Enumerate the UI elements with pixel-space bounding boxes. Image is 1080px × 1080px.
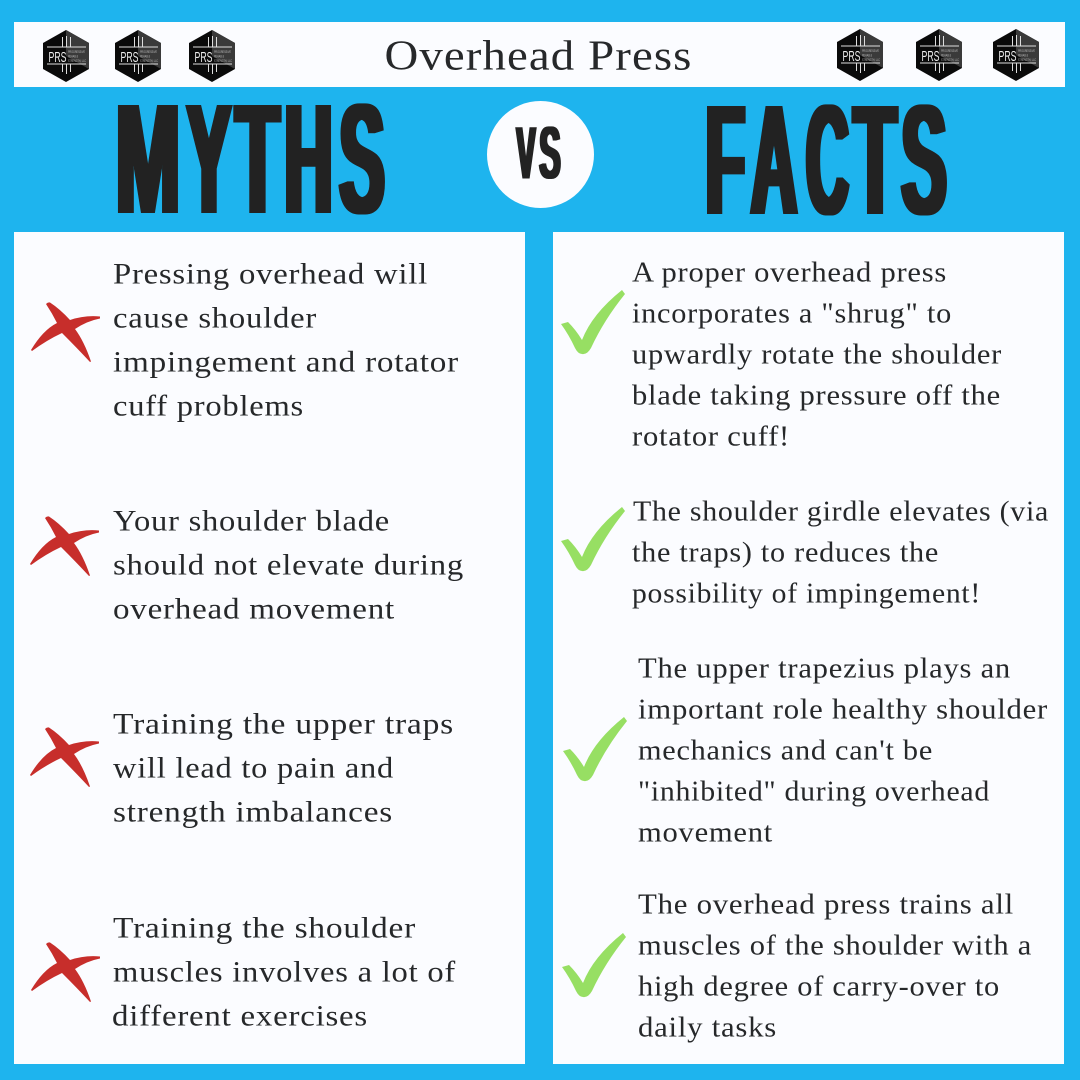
icon: PRS logo 4 <box>837 29 883 81</box>
icon: PRS logo 1: PROGRESSIVE <box>68 50 85 54</box>
text: myth 2: Your shoulder blade <box>113 504 390 538</box>
icon: green check <box>561 290 625 354</box>
text: fact 3: The upper trapezius plays an <box>638 654 1011 684</box>
text: myth 3: Training the upper traps <box>113 708 454 740</box>
icon: red cross <box>30 727 99 787</box>
text: fact 3 <box>638 654 1048 848</box>
icon: green check <box>562 933 626 997</box>
text: fact 4: The overhead press trains all <box>638 890 1014 920</box>
text: fact 1: blade taking pressure off the <box>632 380 1001 412</box>
text: myth 4: Training the shoulder <box>113 912 416 944</box>
icon: PRS logo 3: REHAB & <box>214 54 224 58</box>
badge: VS <box>487 101 594 208</box>
text: fact 2 <box>632 496 1049 610</box>
fact 2 <box>561 496 1049 610</box>
icon: PRS logo 2: STRENGTH, LLC <box>140 59 158 63</box>
text: fact 1: A proper overhead press <box>632 258 947 288</box>
icon: PRS logo 6: PROGRESSIVE <box>1018 49 1035 53</box>
panel: myths <box>14 232 525 1064</box>
heading: FACTS: F <box>706 73 745 248</box>
text: myth 3: strength imbalances <box>113 796 393 828</box>
icon: PRS logo 6: REHAB & <box>1018 54 1028 58</box>
badge: VS: S <box>539 112 561 194</box>
icon: PRS logo 1: STRENGTH, LLC <box>68 59 86 63</box>
heading: FACTS: C <box>806 73 848 248</box>
icon: PRS logo 1 <box>43 30 89 82</box>
myth 1 <box>31 258 459 422</box>
icon: PRS logo 5: STRENGTH, LLC <box>941 58 959 62</box>
myth 3 <box>30 708 454 828</box>
icon: PRS logo 2 <box>115 30 161 82</box>
text: fact 2: the traps) to reduces the <box>632 538 939 568</box>
text: fact 4 <box>638 890 1032 1044</box>
icon: PRS logo 2: PRS <box>120 49 138 66</box>
badge: VS: V <box>516 112 536 194</box>
heading: MYTHS <box>116 72 385 247</box>
text: fact 1: rotator cuff! <box>632 422 790 452</box>
icon: green check <box>561 507 625 571</box>
icon: PRS logo 1: PRS <box>48 49 66 66</box>
text: fact 2: possibility of impingement! <box>632 578 981 610</box>
icon: PRS logo 2: PROGRESSIVE <box>140 50 157 54</box>
text: myth 4 <box>112 912 456 1032</box>
text: myth 1: impingement and rotator <box>113 346 459 378</box>
text: fact 1 <box>632 258 1002 452</box>
icon: PRS logo 3: PRS <box>194 49 212 66</box>
icon: PRS logo 3: PROGRESSIVE <box>214 50 231 54</box>
title: Overhead Press <box>384 34 692 80</box>
myth 4 <box>31 912 456 1032</box>
heading: MYTHS: M <box>116 72 180 247</box>
text: S <box>901 73 947 248</box>
text: fact 1: upwardly rotate the shoulder <box>632 340 1002 370</box>
text: myth 1: cuff problems <box>113 390 304 422</box>
text: fact 4: daily tasks <box>638 1012 777 1044</box>
text: myth 1: cause shoulder <box>113 302 317 334</box>
text: fact 1: incorporates a "shrug" to <box>632 298 952 330</box>
icon: PRS logo 6 <box>993 29 1039 81</box>
heading: MYTHS: T <box>236 72 279 247</box>
icon: PRS logo 3 <box>189 30 235 82</box>
icon: PRS logo 5 <box>916 29 962 81</box>
text: myth 3: will lead to pain and <box>113 752 394 784</box>
icon: PRS logo 3: STRENGTH, LLC <box>214 59 232 63</box>
text: fact 4: high degree of carry-over to <box>638 972 1000 1002</box>
heading: MYTHS: Y <box>187 72 231 247</box>
text: myth 2: should not elevate during <box>113 548 464 582</box>
text: myth 2: overhead movement <box>113 592 395 626</box>
icon: PRS logo 4: PROGRESSIVE <box>862 49 879 53</box>
text: myth 1: Pressing overhead will <box>113 258 428 290</box>
myth 2 <box>30 504 464 626</box>
fact 1 <box>561 258 1002 452</box>
icon: PRS logo 4: PRS <box>842 48 860 65</box>
icon: PRS logo 5: PROGRESSIVE <box>941 49 958 53</box>
icon: PRS logo 5: REHAB & <box>941 54 951 58</box>
text: myth 4: muscles involves a lot of <box>113 956 456 988</box>
text: fact 3: mechanics and can't be <box>638 736 933 766</box>
icon: PRS logo 2: REHAB & <box>140 54 150 58</box>
icon: PRS logo 4: STRENGTH, LLC <box>862 58 880 62</box>
panel: header bar <box>14 22 1065 87</box>
heading: FACTS <box>706 73 947 248</box>
text: myth 3 <box>113 708 454 828</box>
text: fact 3: movement <box>638 818 773 848</box>
heading: MYTHS: H <box>285 72 332 247</box>
text: fact 4: muscles of the shoulder with a <box>638 930 1032 962</box>
icon: PRS logo 1: REHAB & <box>68 54 78 58</box>
icon: PRS logo 5: PRS <box>922 48 940 65</box>
text: myth 1 <box>113 258 459 422</box>
text: fact 3: important role healthy shoulder <box>638 694 1048 726</box>
text: fact 2: The shoulder girdle elevates (via <box>633 496 1049 528</box>
text: myth 4: different exercises <box>112 1000 368 1032</box>
panel: facts <box>553 232 1064 1064</box>
icon: red cross <box>31 942 100 1002</box>
heading: FACTS: T <box>854 73 896 248</box>
icon: green check <box>563 717 627 781</box>
text: fact 3: "inhibited" during overhead <box>638 776 990 808</box>
icon: red cross <box>30 516 99 576</box>
icon: red cross <box>31 302 100 362</box>
fact 4 <box>562 890 1032 1044</box>
icon: PRS logo 6: PRS <box>998 48 1016 65</box>
icon: PRS logo 4: REHAB & <box>862 54 872 58</box>
text: S <box>339 72 385 247</box>
heading: FACTS: A <box>751 73 797 248</box>
icon: PRS logo 6: STRENGTH, LLC <box>1018 58 1036 62</box>
text: myth 2 <box>113 504 464 626</box>
fact 3 <box>563 654 1048 848</box>
